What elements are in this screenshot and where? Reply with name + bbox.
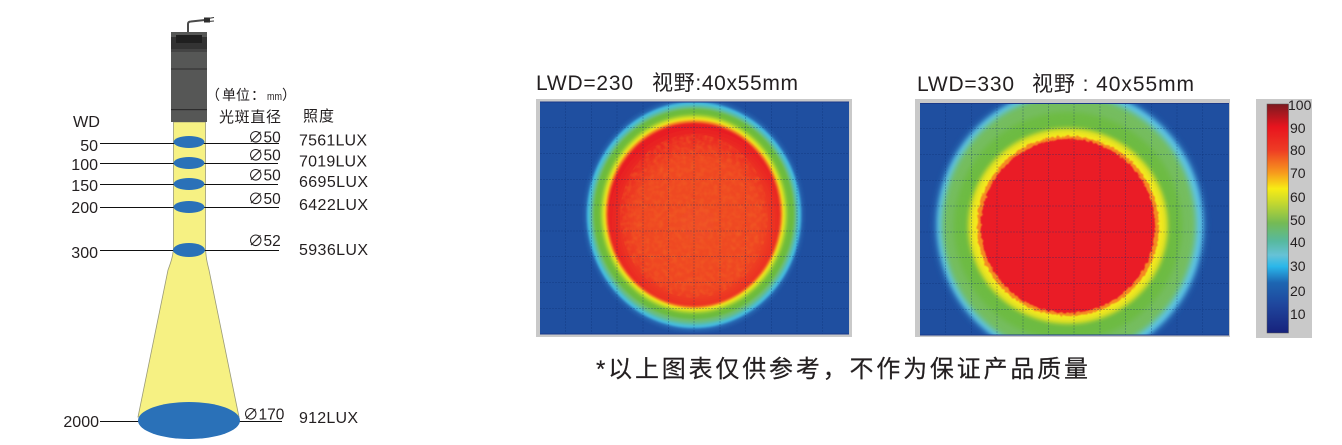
spot diameter values: ∅50: [248, 148, 281, 164]
working distance values: 200: [71, 200, 98, 217]
heading: LWD=330: 视野 : 40x55mm: [1032, 73, 1194, 96]
icon: camera with cable: [171, 18, 214, 122]
working distance values: 50: [80, 138, 98, 155]
working distance values: 150: [71, 178, 98, 195]
legend: colour scale: 100: [1288, 97, 1312, 113]
illuminance values: [299, 132, 368, 427]
legend: colour scale: 20: [1290, 283, 1306, 299]
working distance values: [63, 138, 99, 431]
light beam: [138, 122, 239, 417]
illuminance values: 7561LUX: [299, 132, 367, 150]
legend: colour scale: 40: [1290, 234, 1306, 250]
illuminance values: 912LUX: [299, 410, 358, 427]
spot diameter values: [243, 130, 285, 424]
illuminance values: 5936LUX: [299, 242, 368, 259]
illuminance values: 6422LUX: [299, 197, 368, 214]
heading: LWD=330: LWD=330: [917, 73, 1014, 96]
unit label: mm: [267, 91, 282, 103]
working distance values: 300: [71, 245, 98, 262]
legend: colour scale: [1256, 97, 1312, 338]
heading: illuminance: 照度: [303, 108, 334, 125]
chart: heatmap LWD=330: [915, 99, 1230, 337]
legend: colour scale: 50: [1290, 212, 1306, 228]
leader lines: [100, 144, 282, 422]
spot diameter values: ∅50: [248, 168, 281, 184]
unit label: （: [206, 87, 220, 103]
heading: spot diameter: 光斑直径: [219, 109, 281, 126]
heading: LWD=230: LWD=230: [536, 72, 633, 95]
illuminance values: 6695LUX: [299, 174, 368, 191]
unit label: ）: [282, 87, 296, 103]
legend: colour scale: 80: [1290, 142, 1306, 158]
legend: colour scale: 90: [1290, 120, 1306, 136]
legend: colour scale: 70: [1290, 165, 1306, 181]
light spots: [138, 136, 240, 439]
disclaimer note: *以上图表仅供参考，不作为保证产品质量: [596, 356, 1088, 383]
heading: LWD=230: 视野:40x55mm: [652, 72, 798, 95]
spot diameter values: ∅170: [243, 406, 285, 424]
spot diameter values: ∅50: [248, 130, 281, 146]
legend: colour scale: 60: [1290, 189, 1306, 205]
heading: WD: WD: [73, 114, 100, 131]
panel: working distance diagram: [63, 18, 368, 439]
working distance values: 2000: [63, 414, 99, 431]
chart: heatmap LWD=230: [536, 99, 852, 337]
unit label: 单位: [222, 87, 250, 103]
illuminance values: 7019LUX: [299, 154, 367, 170]
legend: colour scale: 10: [1290, 306, 1306, 322]
unit label: ：: [251, 87, 265, 103]
spot diameter values: ∅52: [248, 233, 281, 250]
working distance values: 100: [71, 157, 98, 174]
spot diameter values: ∅50: [248, 191, 281, 208]
legend: colour scale: 30: [1290, 258, 1306, 274]
